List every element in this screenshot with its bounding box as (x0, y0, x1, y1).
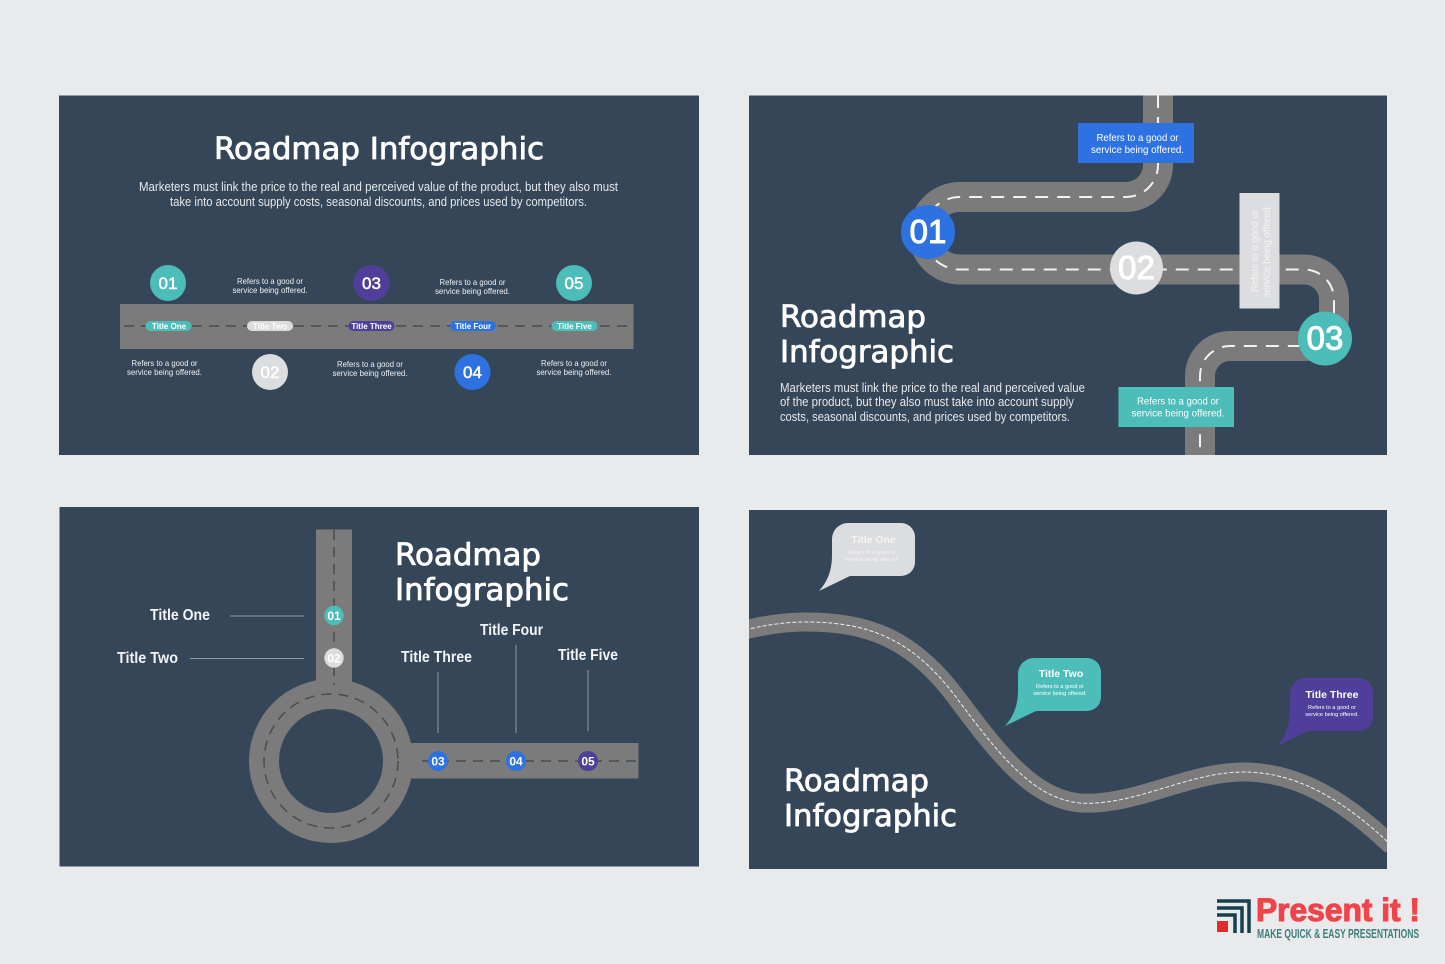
speech bubble: title two: Refers to a good or (1036, 684, 1084, 690)
speech bubble: title two: service being offered. (1033, 691, 1087, 697)
title: Infographic (784, 799, 957, 834)
captions: service being offered. (435, 286, 510, 296)
logo mark (1217, 901, 1249, 933)
title pills: Title Four (455, 322, 491, 331)
title pills: Title One (152, 322, 187, 331)
speech bubble: title three (1277, 678, 1373, 746)
captions: Refers to a good or (440, 277, 506, 287)
description: Marketers must link the price to the real and perceived value (780, 381, 1085, 395)
title: Roadmap (780, 300, 926, 335)
description: take into account supply costs, seasonal discounts, and prices used by competitors. (170, 195, 587, 209)
speech bubble: title three: Refers to a good or (1308, 705, 1356, 711)
captions: service being offered. (332, 368, 408, 378)
road markers: 05 (581, 754, 595, 768)
number badges (150, 265, 592, 390)
marker 02 (1110, 242, 1163, 294)
labels: Title Four (480, 622, 543, 639)
panel: winding road (749, 95, 1387, 456)
logo wordmark: Present it ! (1256, 892, 1420, 928)
callout: blue: service being offered. (1091, 144, 1184, 156)
panel: horizontal roadmap (59, 96, 699, 455)
title pills: Title Two (253, 322, 287, 331)
marker 03 (1298, 312, 1352, 366)
speech bubble: title one (819, 523, 915, 591)
speech bubble: title two (1005, 658, 1101, 726)
captions: service being offered. (127, 367, 202, 377)
panel: curved road with speech bubbles (745, 510, 1392, 869)
description (780, 381, 1085, 424)
callout: teal (1118, 387, 1234, 427)
roundabout road (264, 530, 638, 828)
callout: teal: Refers to a good or (1137, 396, 1219, 408)
speech bubble: title one: Title One (851, 534, 896, 546)
title: Roadmap (395, 538, 541, 573)
description: of the product, but they also must take into account supply (780, 395, 1075, 409)
callout: grey (1240, 193, 1280, 308)
description (139, 180, 618, 209)
title (784, 764, 957, 834)
title pills (146, 321, 598, 331)
marker 03: 03 (1307, 320, 1343, 356)
number badges: 03 (362, 274, 381, 293)
title (395, 538, 569, 608)
road markers: 04 (509, 754, 523, 768)
captions: Refers to a good or (237, 276, 303, 286)
labels: Title One (150, 607, 210, 624)
captions: Refers to a good or (541, 358, 607, 368)
road markers (324, 606, 598, 771)
road markers: 01 (327, 609, 341, 623)
marker 01: 01 (910, 213, 946, 250)
callout: teal: service being offered. (1132, 408, 1224, 420)
captions (127, 276, 612, 378)
marker 01 (901, 205, 955, 259)
captions: Refers to a good or (337, 359, 403, 369)
callout: blue: Refers to a good or (1096, 132, 1179, 144)
callout: grey: service being offered. (1261, 204, 1273, 298)
speech bubble: title one: Refers to a good or (848, 550, 896, 556)
labels (117, 607, 618, 667)
title pills: Title Five (557, 322, 592, 331)
number badges: 05 (565, 274, 583, 293)
title pills: Title Three (351, 322, 392, 331)
marker 02: 02 (1118, 249, 1155, 286)
road markers: 02 (327, 652, 341, 666)
panel: roundabout road (60, 507, 699, 866)
labels: Title Three (401, 649, 472, 666)
description: Marketers must link the price to the real and perceived value of the product, but they also must (139, 180, 618, 194)
labels: Title Two (117, 650, 178, 667)
callout: grey: Refers to a good or (1249, 210, 1261, 292)
number badges: 02 (261, 363, 279, 382)
title: Infographic (395, 573, 569, 608)
straight road (120, 304, 634, 349)
number badges: 04 (463, 363, 482, 382)
speech bubble: title three: service being offered. (1305, 712, 1359, 718)
captions: service being offered. (536, 367, 612, 377)
winding road (924, 95, 1334, 456)
title (780, 300, 954, 370)
curved road (745, 622, 1392, 846)
speech bubble: title two: Title Two (1039, 668, 1083, 680)
speech bubble: title three: Title Three (1306, 689, 1359, 701)
title: Infographic (780, 335, 954, 370)
captions: service being offered. (232, 285, 308, 295)
description: costs, seasonal discounts, and prices used by competitors. (780, 410, 1070, 424)
leader lines (190, 616, 588, 733)
number badges: 01 (159, 274, 177, 293)
callout: blue (1078, 123, 1194, 163)
title: Roadmap (784, 764, 929, 799)
title: Roadmap Infographic (214, 132, 544, 167)
labels: Title Five (558, 647, 618, 664)
road markers: 03 (431, 754, 445, 768)
logo: Present it (1217, 892, 1420, 941)
speech bubble: title one: service being offered. (845, 557, 899, 563)
captions: Refers to a good or (132, 358, 198, 368)
